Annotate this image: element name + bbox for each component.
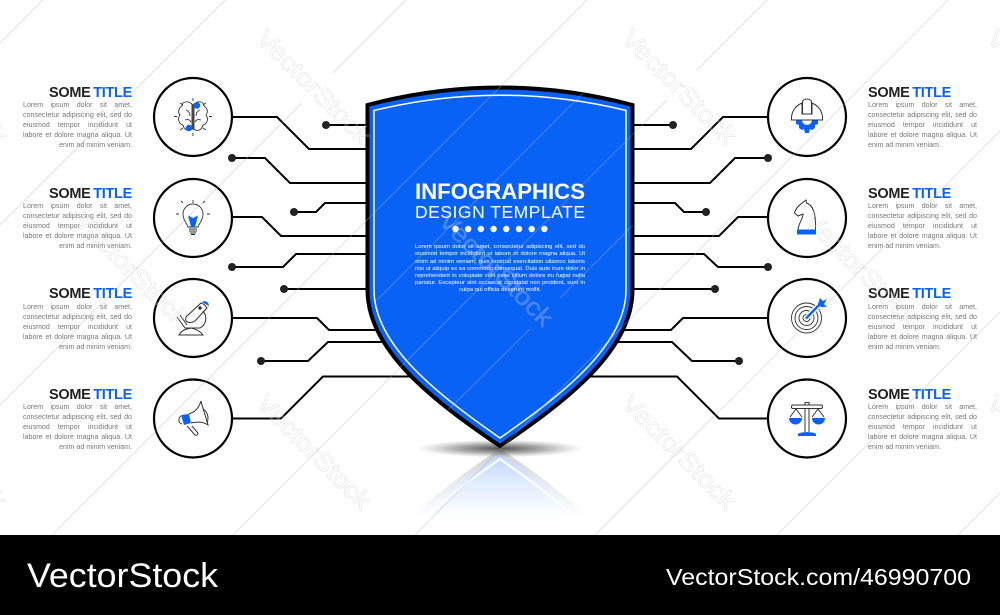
shield paragraph: pariatur. Excepteur sint occaecat cupidatat non proident, sunt in (415, 280, 585, 286)
text block: right 4: consectetur adipiscing elit, sed do (868, 413, 977, 421)
icon circle: chess knight (768, 179, 846, 257)
text block: left 1: SOME TITLE (49, 85, 132, 101)
text block: right 4: eiusmod tempor incididunt ut (868, 423, 977, 431)
text block: right 3: enim ad minim veniam. (868, 343, 941, 351)
text block: left 2: eiusmod tempor incididunt ut (23, 222, 132, 230)
text block: left 3: SOME TITLE (49, 286, 132, 302)
text block: right 1: SOME TITLE (868, 85, 951, 101)
text block: left 3: enim ad minim veniam. (59, 343, 132, 351)
icon circle: target (768, 279, 846, 357)
dot row (452, 226, 548, 232)
text block: left 3: labore et dolore magna aliqua. Ut (23, 333, 132, 341)
text block: left 4: SOME TITLE (49, 387, 132, 403)
text block: left 2: Lorem ipsum dolor sit amet, (23, 202, 132, 210)
icon circle: brain (154, 78, 232, 156)
watermarks: VectorStock (433, 206, 559, 333)
text block: right 3: Lorem ipsum dolor sit amet, (868, 302, 977, 310)
shield paragraph: Lorem ipsum dolor sit amet, consectetur adipiscing elit, sed do (415, 244, 585, 250)
text block: right 3: labore et dolore magna aliqua. Ut (868, 333, 977, 341)
circuit dots: right (669, 121, 772, 365)
text block: left 1: consectetur adipiscing elit, sed do (23, 111, 132, 119)
text block: left 2: SOME TITLE (49, 186, 132, 202)
text block: left 3: Lorem ipsum dolor sit amet, (23, 302, 132, 310)
shield paragraph: enim ad minim veniam, quis nostrud exercitation ullamco laboris (415, 259, 585, 265)
text block: right 3: eiusmod tempor incididunt ut (868, 323, 977, 331)
text block: left 3: eiusmod tempor incididunt ut (23, 323, 132, 331)
text block: left 3: consectetur adipiscing elit, sed do (23, 313, 132, 321)
text block: left 1: labore et dolore magna aliqua. Ut (23, 131, 132, 139)
shield heading: INFOGRAPHICS (415, 179, 585, 204)
text block: right 4: SOME TITLE (868, 387, 951, 403)
text block: left 3 (23, 286, 132, 351)
text block: left 2 (23, 186, 132, 250)
text block: left 4: labore et dolore magna aliqua. Ut (23, 433, 132, 441)
text block: left 1: Lorem ipsum dolor sit amet, (23, 101, 132, 109)
text block: left 4: eiusmod tempor incididunt ut (23, 423, 132, 431)
text block: right 2: eiusmod tempor incididunt ut (868, 222, 977, 230)
watermarks: VectorStock (251, 24, 377, 151)
icon circle: light bulb (154, 179, 232, 257)
text block: right 1: enim ad minim veniam. (868, 141, 941, 149)
text block: right 2: Lorem ipsum dolor sit amet, (868, 202, 977, 210)
watermarks: VectorStock (251, 389, 377, 516)
shield body (368, 88, 632, 446)
text block: right 1: consectetur adipiscing elit, sed do (868, 111, 977, 119)
text block: right 4: labore et dolore magna aliqua. Ut (868, 433, 977, 441)
text block: left 2: labore et dolore magna aliqua. Ut (23, 232, 132, 240)
text block: left 1: enim ad minim veniam. (59, 141, 132, 149)
text block: right 2: enim ad minim veniam. (868, 242, 941, 250)
circuit lines: left (232, 117, 415, 418)
shield paragraph: eiusmod tempor incididunt ut labore et dolore magna aliqua. Ut (415, 251, 585, 257)
watermarks: VectorStock (616, 24, 742, 151)
text block: right 1: labore et dolore magna aliqua. Ut (868, 131, 977, 139)
icon circle: helmet and gear (768, 78, 846, 156)
bottom image id: VectorStock.com/46990700 (666, 564, 971, 590)
watermarks (0, 24, 1000, 516)
icon circle: megaphone (154, 380, 232, 458)
shield subheading: DESIGN TEMPLATE (415, 202, 585, 222)
text block: left 1: eiusmod tempor incididunt ut (23, 121, 132, 129)
bottom black bar (0, 535, 1000, 615)
watermarks: VectorStock (616, 389, 742, 516)
circuit dots: left (228, 121, 330, 365)
shield reflection (428, 450, 572, 508)
central shield (368, 88, 632, 446)
text block: right 1: eiusmod tempor incididunt ut (868, 121, 977, 129)
shield inner outline (374, 95, 626, 438)
text block: right 2: consectetur adipiscing elit, sed do (868, 212, 977, 220)
shield paragraph: nisi ut aliquip ex ea commodo consequat. Duis aute irure dolor in (415, 266, 585, 272)
shield ground shadow (416, 440, 584, 458)
text block: right 2: labore et dolore magna aliqua. Ut (868, 232, 977, 240)
text block: left 4: enim ad minim veniam. (59, 443, 132, 451)
text block: right 3: consectetur adipiscing elit, sed do (868, 313, 977, 321)
text block: left 4: consectetur adipiscing elit, sed do (23, 413, 132, 421)
circuit lines: right (585, 117, 768, 418)
text block: left 4 (23, 387, 132, 451)
text block: left 4: Lorem ipsum dolor sit amet, (23, 403, 132, 411)
watermarks: VectorStock (798, 206, 924, 333)
shield paragraph: culpa qui officia deserunt mollit. (459, 287, 541, 293)
watermarks: VectorStock (68, 206, 194, 333)
text block: left 2: consectetur adipiscing elit, sed do (23, 212, 132, 220)
icon circle: microscope (154, 279, 232, 357)
text block: right 2 (868, 186, 977, 250)
text block: left 1 (23, 85, 132, 149)
text block: right 3 (868, 286, 977, 351)
text block: right 1 (868, 85, 977, 149)
text block: right 1: Lorem ipsum dolor sit amet, (868, 101, 977, 109)
text block: right 4: Lorem ipsum dolor sit amet, (868, 403, 977, 411)
text block: right 4 (868, 387, 977, 451)
icon circle: scales (768, 380, 846, 458)
text block: right 4: enim ad minim veniam. (868, 443, 941, 451)
bottom brand name: VectorStock (27, 557, 219, 595)
text block: right 2: SOME TITLE (868, 186, 951, 202)
shield paragraph: reprehenderit in voluptate velit esse cillum dolore eu fugiat nulla (415, 273, 585, 279)
text block: left 2: enim ad minim veniam. (59, 242, 132, 250)
shield paragraph (415, 244, 585, 293)
text block: right 3: SOME TITLE (868, 286, 951, 302)
